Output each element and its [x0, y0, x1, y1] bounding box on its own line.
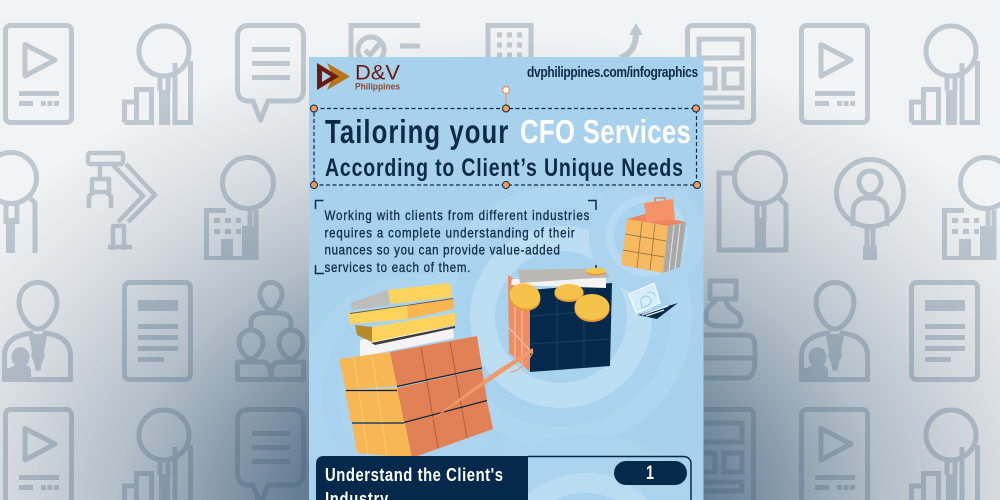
illustration: navy cube with coins — [507, 268, 612, 372]
intro text: services to each of them. — [324, 259, 470, 275]
concentric ring pattern — [470, 195, 688, 500]
intro text: requires a complete understanding of their — [324, 224, 575, 241]
illustration: pen — [427, 348, 533, 423]
icon: office grid — [488, 26, 531, 60]
icon: video document bottom left — [6, 410, 72, 500]
icon: magnifier chart row 1 — [124, 26, 190, 125]
title line 1: Tailoring your — [325, 114, 509, 151]
icon: layout document bottom — [688, 410, 754, 500]
title line 2: According to Client’s Unique Needs — [325, 154, 683, 182]
cube grooves — [354, 355, 387, 456]
logo: D&V Philippines — [317, 62, 400, 92]
icon: rising arrow — [620, 23, 643, 58]
card heading: Understand the Client's — [325, 464, 503, 485]
step number pill: 1 — [646, 462, 654, 484]
icon: stamp on tray — [700, 281, 755, 378]
icon: layout document row 1 — [688, 26, 754, 122]
title line 1: CFO Services — [520, 114, 691, 151]
card: understand the client's industry — [316, 456, 691, 500]
icon: video document row 1 — [6, 26, 72, 122]
icon: businessman left — [4, 282, 70, 382]
title line 1 — [325, 119, 690, 150]
icon: magnifier chart right — [912, 26, 978, 125]
intro text — [324, 207, 589, 275]
icon: video document right — [802, 26, 868, 122]
briefcase — [644, 198, 675, 223]
logo subtitle: Philippines — [355, 82, 400, 92]
cube slab top — [339, 336, 482, 390]
icon: report right — [912, 282, 978, 380]
illustration: orange and yellow cube with books — [339, 283, 493, 458]
icon: magnifier person left cut — [0, 152, 36, 253]
illustration: small cube with briefcase — [621, 198, 686, 273]
books stack — [348, 283, 455, 357]
icon: businessman right — [801, 282, 868, 382]
icon: group left — [238, 282, 304, 380]
step number pill — [614, 461, 687, 485]
cube slab bottom — [352, 401, 493, 458]
icon: magnifier chart bottom right — [912, 410, 978, 500]
icon: speech bubble row 1 — [238, 26, 304, 120]
icon: magnifier building right — [942, 158, 1000, 260]
logo wordmark: D&V — [355, 62, 400, 84]
icon: robot arm — [88, 153, 155, 250]
icon: magnifier building left — [204, 158, 274, 260]
title selection frame — [310, 86, 700, 188]
icon: video document bottom right — [802, 410, 868, 500]
icon: logo arrows — [317, 63, 350, 90]
icon: magnifier document right — [719, 152, 786, 251]
website url: dvphilippines.com/infographics — [527, 64, 698, 80]
icon: report left — [124, 282, 190, 380]
intro text: Working with clients from different industries — [324, 207, 589, 223]
intro text brackets — [316, 200, 596, 274]
panel: infographic poster — [298, 57, 712, 500]
intro text: nuances so you can provide value-added — [324, 241, 560, 258]
icon: checklist card — [351, 26, 420, 63]
cube slab middle — [345, 369, 487, 422]
icon: speech bubble bottom — [238, 410, 304, 500]
illustration: laptop with chat — [629, 283, 678, 319]
icon: magnifier chart bottom — [124, 410, 190, 500]
icon: magnifier person right — [836, 160, 904, 260]
gold coins — [507, 268, 610, 322]
